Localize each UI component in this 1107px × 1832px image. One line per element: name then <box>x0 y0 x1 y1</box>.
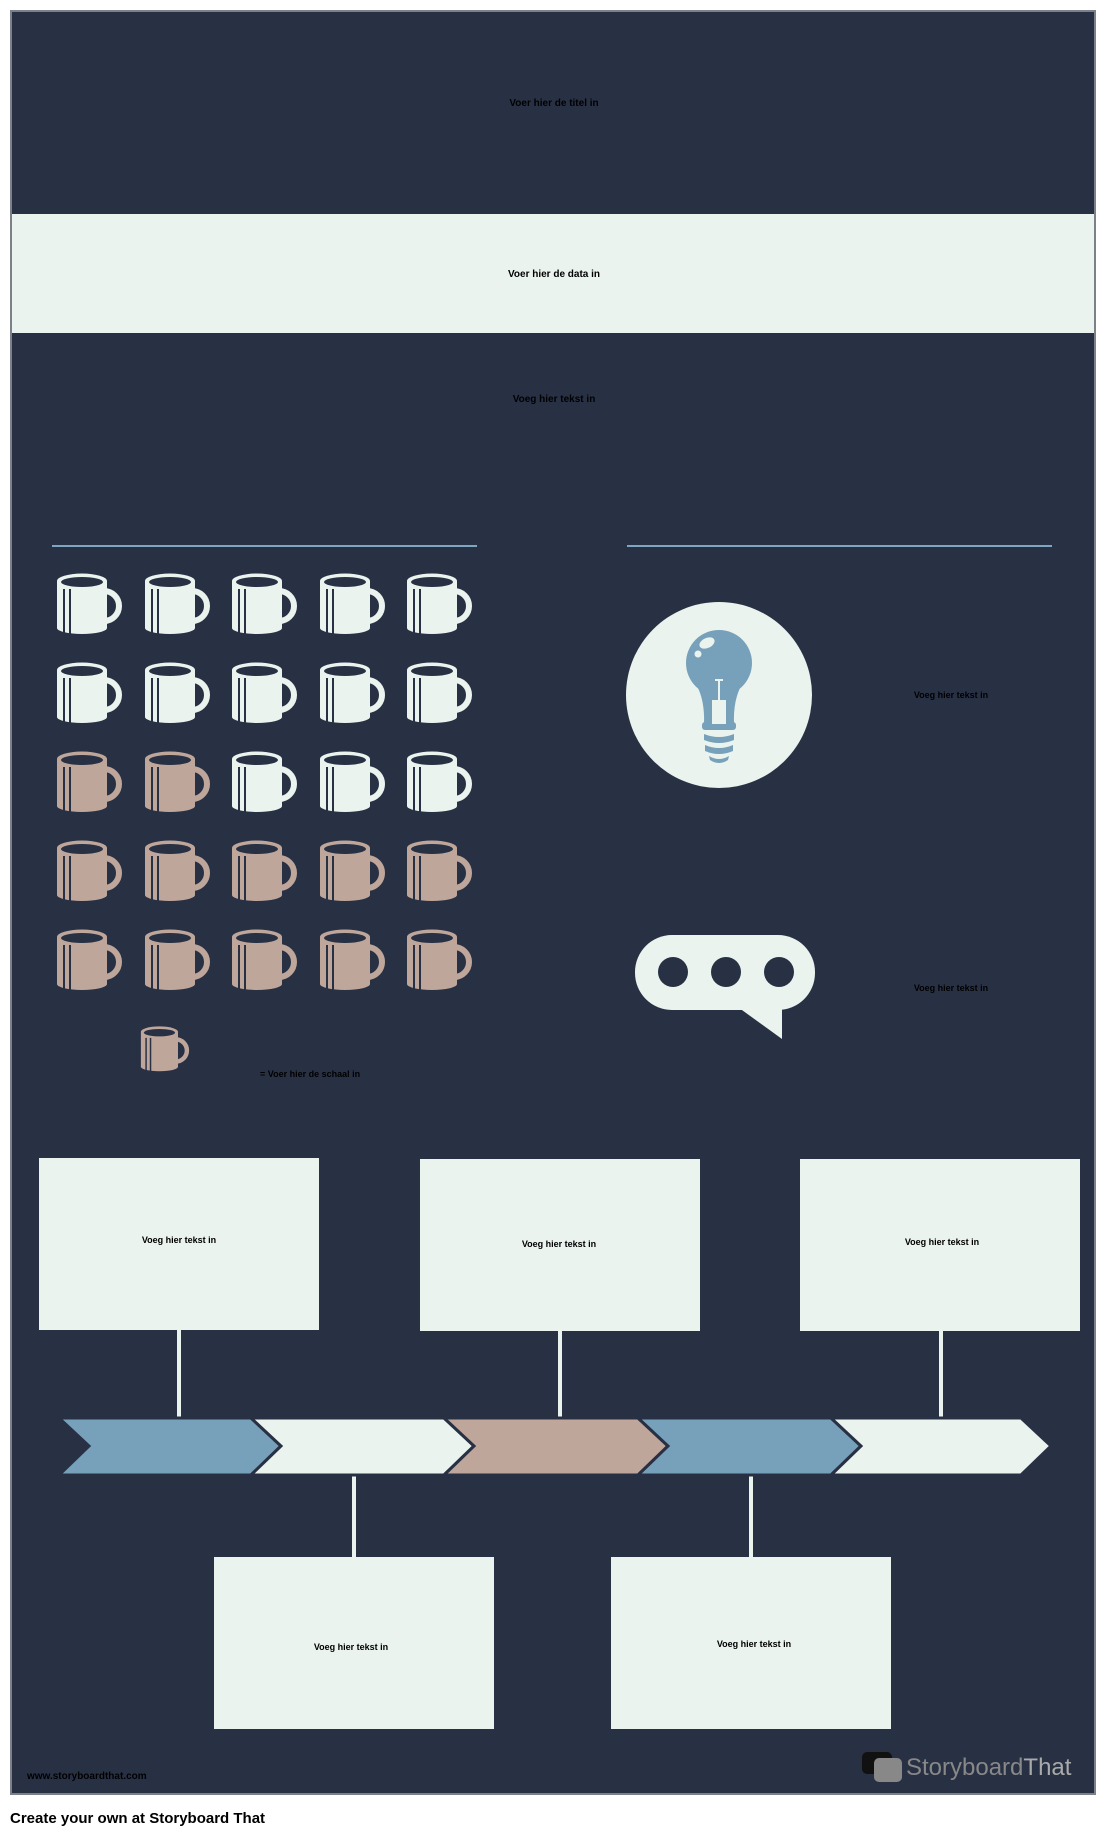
data band <box>12 214 1094 333</box>
legend: scale: = Voer hier de schaal in <box>260 1069 360 1079</box>
timeline box 4 <box>214 1557 494 1729</box>
timeline box 5 <box>611 1557 891 1729</box>
text beside bulb: Voeg hier tekst in <box>914 690 988 700</box>
timeline box 4: Voeg hier tekst in <box>314 1642 388 1652</box>
timeline box 1: Voeg hier tekst in <box>142 1235 216 1245</box>
data band: Voer hier de data in <box>508 269 600 280</box>
title: Voer hier de titel in <box>509 98 599 109</box>
timeline box 2: Voeg hier tekst in <box>522 1239 596 1249</box>
timeline box 3: Voeg hier tekst in <box>905 1237 979 1247</box>
legend: scale <box>141 1026 360 1079</box>
footer url: www.storyboardthat.com <box>26 1771 147 1782</box>
intro text: Voeg hier tekst in <box>513 394 595 405</box>
divider line left <box>52 545 477 547</box>
timeline box 3 <box>800 1159 1080 1331</box>
icon: light bulb <box>626 602 812 788</box>
divider line right <box>627 545 1052 547</box>
mug pictogram grid <box>57 574 469 990</box>
logo: StoryboardThat <box>906 1754 1072 1781</box>
bottom caption: Create your own at Storyboard That <box>10 1810 265 1827</box>
timeline box 1 <box>39 1158 319 1330</box>
chevron timeline arrow <box>59 1418 1051 1475</box>
timeline box 5: Voeg hier tekst in <box>717 1639 791 1649</box>
timeline box 2 <box>420 1159 700 1331</box>
icon: speech bubble <box>635 935 815 1039</box>
connector lines <box>177 1329 943 1558</box>
text beside bubble: Voeg hier tekst in <box>914 983 988 993</box>
